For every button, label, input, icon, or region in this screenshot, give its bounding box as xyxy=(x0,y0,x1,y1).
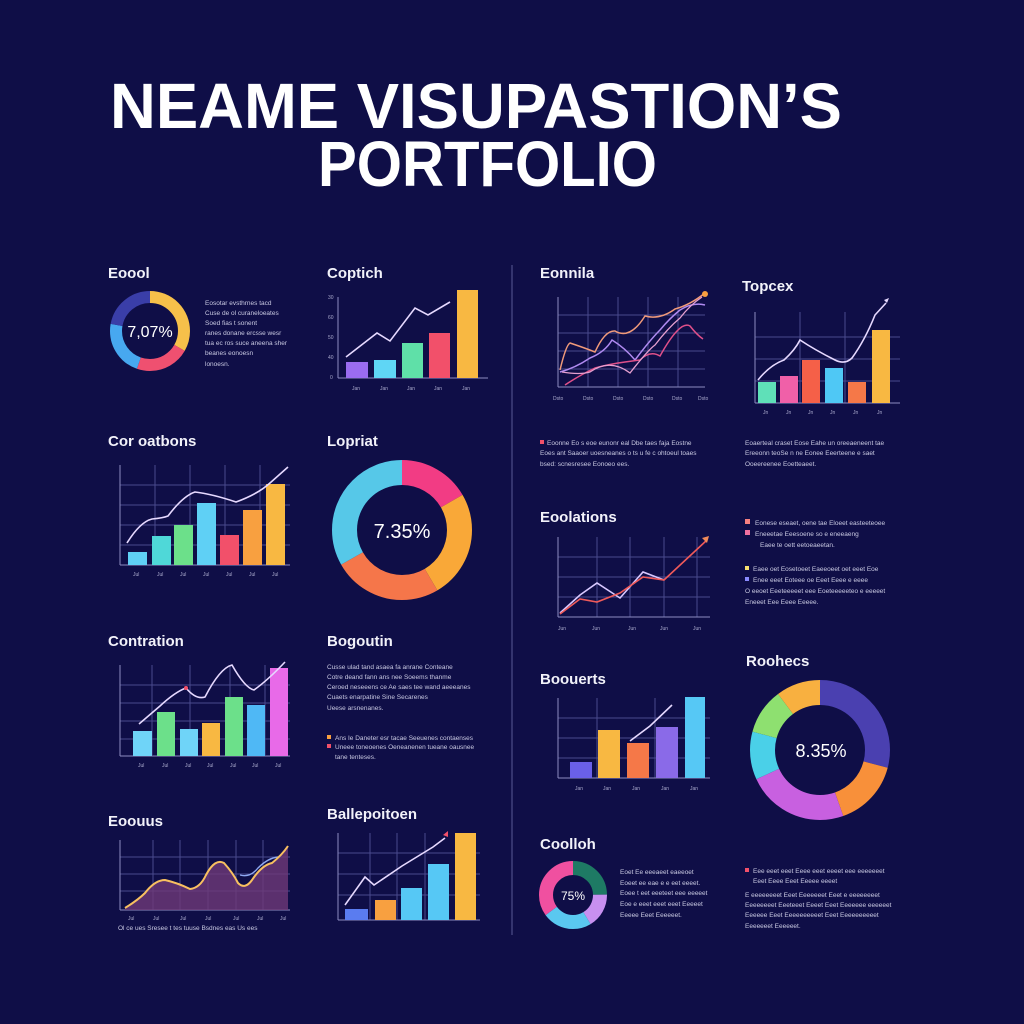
panel: Eoolations line chart: Eoolations xyxy=(540,509,617,526)
text block: beanes eonoesn xyxy=(205,350,253,357)
panel: Eoolations line chart: Jun xyxy=(693,626,701,632)
panel: Contration bar chart: Contration xyxy=(108,633,184,650)
text block: ranes donane ercsse wesr xyxy=(205,330,282,337)
panel: Bogoutin text: Ans Ie Daneter esr tacae Seeuenes contaenses xyxy=(335,735,474,742)
panel: Eoolations line chart: Jun xyxy=(558,626,566,632)
text block: bottom right: Eeet Eeee Eeet Eeeee eeeet xyxy=(753,878,837,885)
panel: Coptich bar chart: Jan xyxy=(462,386,470,392)
panel: Coolloh small donut: Eoe e eeet eeet eeet Eeeeet xyxy=(620,901,703,908)
panel: Cor oatbons bar chart: Jul xyxy=(180,572,186,578)
text block: Eoet Ee eeeaeet eaeeoet xyxy=(620,869,694,876)
panel: Eonnila line chart: Dsto xyxy=(698,396,708,402)
panel: Contration bar chart: Jul xyxy=(185,763,191,769)
panel: Eonnila line chart: Dsto xyxy=(643,396,654,402)
panel: Topcex bar chart: Topcex xyxy=(742,278,794,295)
panel: Bogoutin text: Uneee toneoenes Oeneanenen tueane oausnee xyxy=(335,744,475,751)
panel: Coptich bar chart: 60 xyxy=(328,315,334,321)
panel: Cor oatbons bar chart: Jul xyxy=(157,572,163,578)
panel: Coolloh small donut: Eoee t eet eeeteet eee eeeeet xyxy=(620,890,708,897)
panel: Eoouus area chart xyxy=(108,813,290,932)
legend xyxy=(327,735,331,739)
panel: Coptich bar chart: Coptich xyxy=(327,265,383,282)
panel: Coptich bar chart xyxy=(327,265,488,392)
panel: Eoouus area chart: Eoouus xyxy=(108,813,163,830)
legend block: right: Eonese eseaet, oene tae Eloeet easteeteoee xyxy=(755,520,885,527)
panel: Roohecs donut xyxy=(746,653,878,808)
panel: Coolloh small donut: 75% xyxy=(561,889,585,903)
panel: Ballepoitoen bar chart: Ballepoitoen xyxy=(327,806,417,823)
panel: Lopriat donut: Lopriat xyxy=(327,433,378,450)
panel: Eoouus area chart: Jul xyxy=(280,916,286,922)
text block: right middle: Ereeonn teoSe n ne Eonee Eeerteene e saet xyxy=(745,450,875,457)
panel: Eoool donut: Eoool xyxy=(108,265,150,282)
panel: Topcex bar chart xyxy=(742,278,900,416)
panel: Contration bar chart: Jul xyxy=(252,763,258,769)
panel: Eoouus area chart: Jul xyxy=(233,916,239,922)
panel: Cor oatbons bar chart: Cor oatbons xyxy=(108,433,196,450)
text block: Soed fias t sonent xyxy=(205,320,257,327)
panel: Eoool donut: 7,07% xyxy=(127,324,173,341)
panel: Topcex bar chart: Jn xyxy=(808,410,814,416)
text block: left middle: Eoes ant Saaoer uoesneanes o ts u fe c ohtoeul toaes xyxy=(540,450,697,457)
panel: Topcex bar chart: Jn xyxy=(763,410,768,416)
panel: Contration bar chart: Jul xyxy=(138,763,144,769)
panel: Topcex bar chart: Jn xyxy=(877,410,882,416)
panel: Coptich bar chart: Jan xyxy=(434,386,442,392)
panel: Boouerts bar chart: Jan xyxy=(575,786,583,792)
panel: Lopriat donut: 7.35% xyxy=(374,521,431,543)
text block: lonoesn. xyxy=(205,361,230,368)
legend block: right: Eneeetae Eeesoene so e eneeaeng xyxy=(755,531,859,538)
title: PORTFOLIO xyxy=(318,128,657,200)
panel: Eoouus area chart: Jul xyxy=(153,916,159,922)
panel: Coolloh small donut xyxy=(540,836,708,922)
panel: Boouerts bar chart: Jan xyxy=(603,786,611,792)
panel: Roohecs donut: 8.35% xyxy=(795,741,847,761)
panel: Lopriat donut xyxy=(327,433,460,588)
panel: Eoolations line chart: Jun xyxy=(660,626,668,632)
panel: Contration bar chart: Jul xyxy=(275,763,281,769)
panel: Coptich bar chart: Jan xyxy=(352,386,360,392)
panel: Eonnila line chart: Dsto xyxy=(672,396,682,402)
panel: Contration bar chart: Jul xyxy=(230,763,236,769)
text block: Eosotar evsthrnes tacd xyxy=(205,300,272,307)
panel: Cor oatbons bar chart: Jul xyxy=(226,572,232,578)
legend block: right: Eaee te oett eetoeaeetan. xyxy=(760,542,835,549)
panel: Eoouus area chart: Ol ce ues Sresee t tes tuuse Bsdnes eas Us ees xyxy=(118,925,258,932)
legend block: right: Eaee oet Eosetoeet Eaeeoeet oet eeet Eoe xyxy=(753,566,879,573)
panel: Bogoutin text: Cusse ulad tand asaea fa anrane Conteane xyxy=(327,664,453,671)
panel: Topcex bar chart: Jn xyxy=(853,410,858,416)
donut chart 7,07% xyxy=(116,297,184,365)
panel: Contration bar chart xyxy=(108,633,290,769)
text block: tua ec ros suce aneena sher xyxy=(205,340,288,347)
panel: Bogoutin text: Ceroed neseeens ce Ae saes tee wand aeeeanes xyxy=(327,684,471,691)
panel: Eonnila line chart: Dsto xyxy=(613,396,624,402)
text block: bottom right: E eeeeeeeet Eeet Eeeeeeet Eeet e eeeeeeeet xyxy=(745,892,880,899)
panel: Bogoutin text: tane tenteses. xyxy=(335,754,376,761)
panel: Coptich bar chart: 30 xyxy=(328,295,334,301)
text block: left middle: Eoonne Eo s eoe eunonr eal Dbe taes faja Eostne xyxy=(547,440,692,447)
panel: Cor oatbons bar chart: Jul xyxy=(133,572,139,578)
panel: Bogoutin text xyxy=(327,633,475,761)
panel: Boouerts bar chart: Boouerts xyxy=(540,671,606,688)
panel: Eoool donut xyxy=(108,265,288,368)
text block: right middle: Ooeereenee Eoetteaeet. xyxy=(745,461,816,468)
panel: Coptich bar chart: Jan xyxy=(380,386,388,392)
panel: Eoouus area chart: Jul xyxy=(128,916,134,922)
panel: Coptich bar chart: 0 xyxy=(330,375,333,381)
text block: left middle: bsed: scnesresee Eonoeo ees. xyxy=(540,461,629,468)
panel: Coptich bar chart: 40 xyxy=(328,355,334,361)
panel: Cor oatbons bar chart xyxy=(108,433,290,578)
text block: bottom right: Eee eeet eeet Eeee eeet eeeet eee eeeeeeet xyxy=(753,868,885,875)
title: NEAME VISUPASTION’S xyxy=(110,70,842,142)
panel: Bogoutin text: Ueese arsnenanes. xyxy=(327,705,384,712)
panel: Boouerts bar chart: Jan xyxy=(661,786,669,792)
panel: Boouerts bar chart: Jan xyxy=(690,786,698,792)
text block: bottom right xyxy=(745,868,892,930)
panel: Ballepoitoen bar chart xyxy=(327,806,480,920)
panel: Boouerts bar chart xyxy=(540,671,710,792)
panel: Eoouus area chart: Jul xyxy=(205,916,211,922)
legend block: right: Eneeet Eee Eeee Eeeee. xyxy=(745,599,819,606)
panel: Topcex bar chart: Jn xyxy=(786,410,792,416)
panel: Topcex bar chart: Jn xyxy=(830,410,836,416)
text block: left middle xyxy=(540,440,697,468)
panel: Coolloh small donut: Eeeee Eeet Eeeeeet. xyxy=(620,912,682,919)
panel: Eoouus area chart: Jul xyxy=(257,916,263,922)
text block: right middle: Eoaerteal craset Eose Eahe un oreeaeneent tae xyxy=(745,440,885,447)
panel: Coptich bar chart: 50 xyxy=(328,335,334,341)
panel: Eoouus area chart: Jul xyxy=(180,916,186,922)
text block: Cuse de ol curaneloeates xyxy=(205,310,279,317)
panel: Eoolations line chart xyxy=(540,509,710,632)
panel: Roohecs donut: Roohecs xyxy=(746,653,809,670)
panel: Cor oatbons bar chart: Jul xyxy=(203,572,209,578)
text block: bottom right: Eeeeee Eeet Eeeeeeeeeet Eeet Eeeeeeeeeet xyxy=(745,912,879,919)
text block: bottom right: Eeeeeeeet Eeeteeet Eeeet Eeet Eeeeeee eeeeeet xyxy=(745,902,892,909)
panel: Bogoutin text: Cuaets enarpatine Sine Secarenes xyxy=(327,694,429,701)
panel: Cor oatbons bar chart: Jul xyxy=(272,572,278,578)
panel: Eoolations line chart: Jun xyxy=(628,626,636,632)
panel: Contration bar chart: Jul xyxy=(207,763,213,769)
legend block: right: O eeoet Eeeteeeeet eee Eoeteeeeeteo e eeeeet xyxy=(745,588,885,595)
panel: Eonnila line chart xyxy=(540,265,708,402)
panel: Contration bar chart: Jul xyxy=(162,763,168,769)
text block: right middle xyxy=(745,440,885,468)
panel: Cor oatbons bar chart: Jul xyxy=(249,572,255,578)
panel: Eonnila line chart: Eonnila xyxy=(540,265,595,282)
panel: Coolloh small donut: Coolloh xyxy=(540,836,596,853)
text block xyxy=(205,300,288,368)
panel: Bogoutin text: Cotre deand fann ans nee Soeems thanme xyxy=(327,674,452,681)
panel: Bogoutin text: Bogoutin xyxy=(327,633,393,650)
legend block: right: Enee eeet Eoteee oe Eeet Eeee e eeee xyxy=(753,577,868,584)
panel: Coptich bar chart: Jan xyxy=(407,386,415,392)
panel: Coolloh small donut: Eoeet ee eae e e eet eeeet. xyxy=(620,880,700,887)
title xyxy=(110,70,842,200)
panel: Eonnila line chart: Dsto xyxy=(553,396,564,402)
panel: Boouerts bar chart: Jan xyxy=(632,786,640,792)
panel: Eoolations line chart: Jun xyxy=(592,626,600,632)
legend block: right xyxy=(745,519,885,606)
panel: Eonnila line chart: Dsto xyxy=(583,396,594,402)
text block: bottom right: Eeeeeeet Eeeeeet. xyxy=(745,923,801,930)
